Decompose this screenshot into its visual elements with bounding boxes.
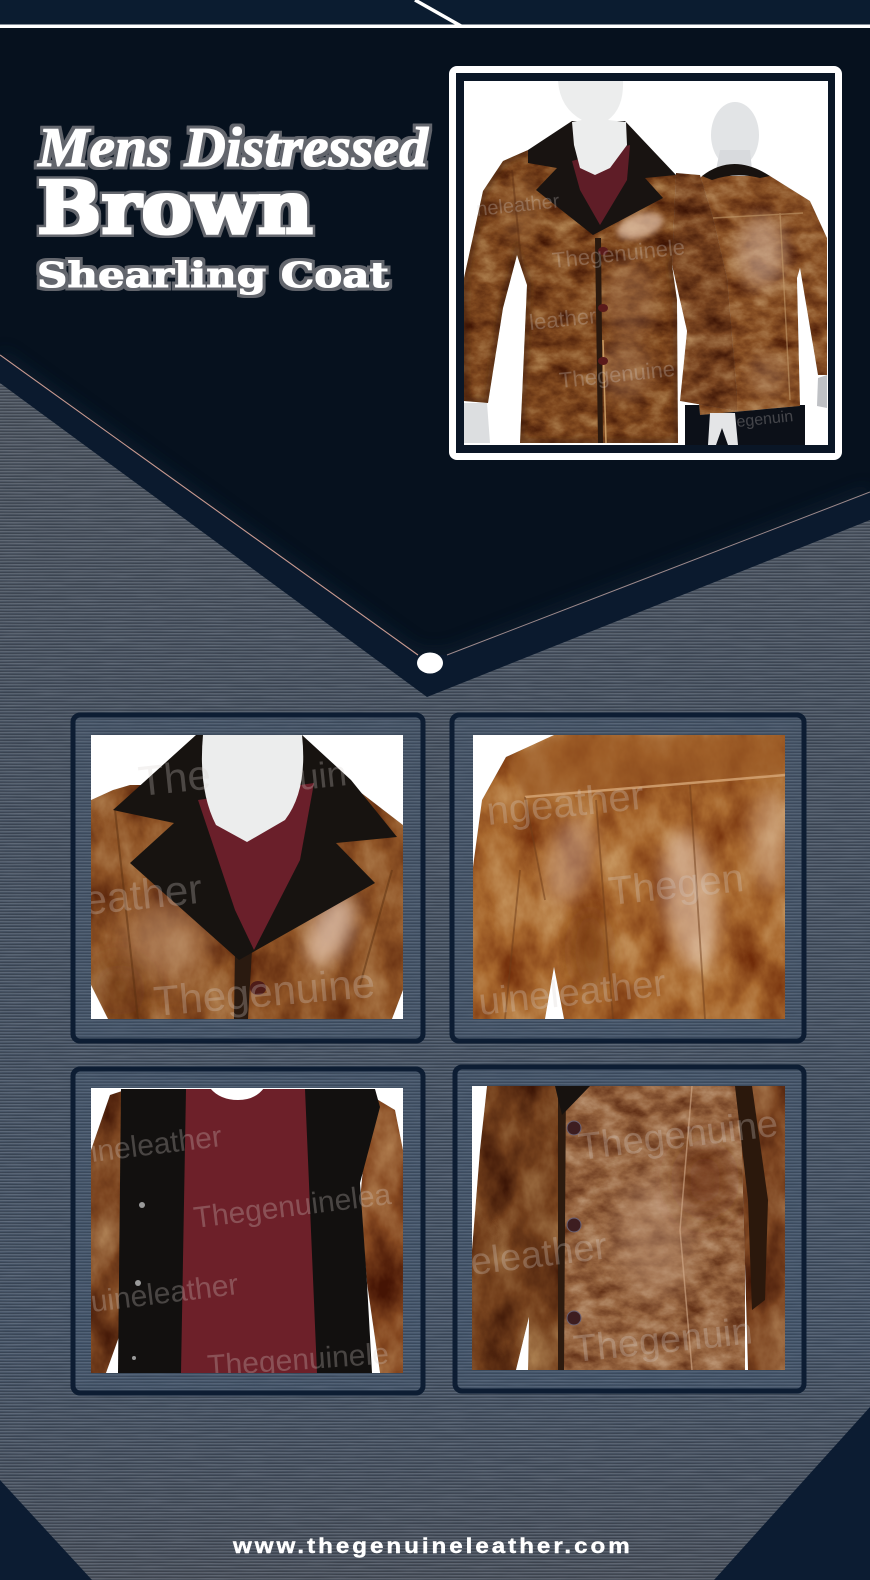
front buttons — [598, 247, 608, 365]
buttons — [567, 1121, 581, 1325]
right arm — [672, 173, 737, 411]
title line: Shearling Coat: Shearling Coat — [37, 255, 389, 296]
watermarks: Thegenuine — [576, 1103, 780, 1169]
watermarks: Thegenuinele — [551, 234, 686, 273]
watermarks — [81, 751, 377, 1025]
left sleeve — [91, 1090, 125, 1373]
watermarks: Thegenuinele — [206, 1337, 390, 1383]
left hand — [464, 403, 490, 443]
detail panel: shearling lining — [73, 1069, 423, 1393]
shirt — [198, 783, 314, 950]
lining photo — [89, 1088, 403, 1383]
maroon shirt — [176, 1089, 325, 1373]
neck — [210, 1088, 264, 1100]
left shearling — [118, 1089, 186, 1373]
near hand — [708, 413, 738, 445]
collar photo — [81, 735, 403, 1025]
dark fold — [735, 1086, 768, 1310]
right shearling — [305, 1089, 380, 1373]
watermarks: Thegenuine — [152, 959, 377, 1025]
main photo: front and back coat — [464, 81, 828, 445]
watermarks — [89, 1120, 393, 1383]
back view coat — [690, 176, 827, 415]
detail panel: back shoulder — [452, 715, 804, 1041]
button — [250, 981, 266, 995]
snaps — [132, 1202, 145, 1360]
left coat panel — [472, 1086, 562, 1370]
bottom right corner triangle — [714, 1407, 870, 1580]
watermarks: Thegenuine — [558, 356, 676, 393]
right sleeve — [360, 1095, 403, 1373]
watermarks: uineleather — [89, 1268, 240, 1319]
back shoulder photo — [473, 735, 785, 1024]
seam — [680, 1086, 692, 1370]
front shirt — [572, 145, 630, 225]
watermarks: uineleather — [477, 962, 668, 1024]
stitched line with button — [0, 355, 870, 674]
buttons photo — [468, 1086, 785, 1371]
main photo frame — [449, 66, 842, 460]
watermarks — [475, 190, 794, 431]
watermarks: ngeather — [484, 774, 646, 834]
watermarks: egenuin — [736, 408, 794, 431]
watermarks: Thegenuin — [572, 1310, 755, 1371]
watermarks: Thegen — [606, 856, 746, 914]
detail panel: collar — [73, 715, 423, 1041]
right sleeve — [740, 1086, 785, 1370]
title line: Mens Distressed: Mens Distressed — [37, 117, 429, 179]
bottom left corner triangle — [0, 1480, 92, 1580]
watermarks: The — [136, 751, 213, 805]
front placket — [595, 238, 603, 443]
placket — [234, 950, 252, 1019]
front collar — [528, 121, 676, 235]
watermarks: Thegenuinelea — [192, 1178, 393, 1235]
white button — [417, 652, 443, 674]
neck — [202, 735, 303, 842]
watermarks — [477, 774, 746, 1024]
top white rule with diagonal — [0, 0, 870, 28]
front coat — [464, 150, 700, 443]
far hand — [817, 375, 827, 408]
collar — [113, 735, 397, 960]
watermarks: eather — [81, 865, 204, 924]
detail panel: buttons — [455, 1067, 804, 1391]
website url: www.thegenuineleather.com — [232, 1534, 633, 1558]
placket line — [558, 1086, 566, 1370]
back view mannequin — [711, 102, 759, 168]
centre coat panel — [560, 1086, 745, 1370]
jeans — [685, 405, 805, 445]
watermarks: neleather — [475, 190, 561, 221]
watermarks: eleather — [468, 1225, 610, 1284]
front mannequin — [558, 81, 627, 175]
back collar — [702, 164, 770, 180]
collar tip — [555, 1086, 590, 1115]
top navy banner — [0, 0, 870, 697]
watermarks: uin — [297, 752, 349, 798]
watermarks: ineleather — [89, 1120, 224, 1169]
watermarks: leather — [528, 303, 597, 335]
watermarks — [468, 1103, 780, 1371]
title line: Brown: Brown — [37, 165, 313, 250]
